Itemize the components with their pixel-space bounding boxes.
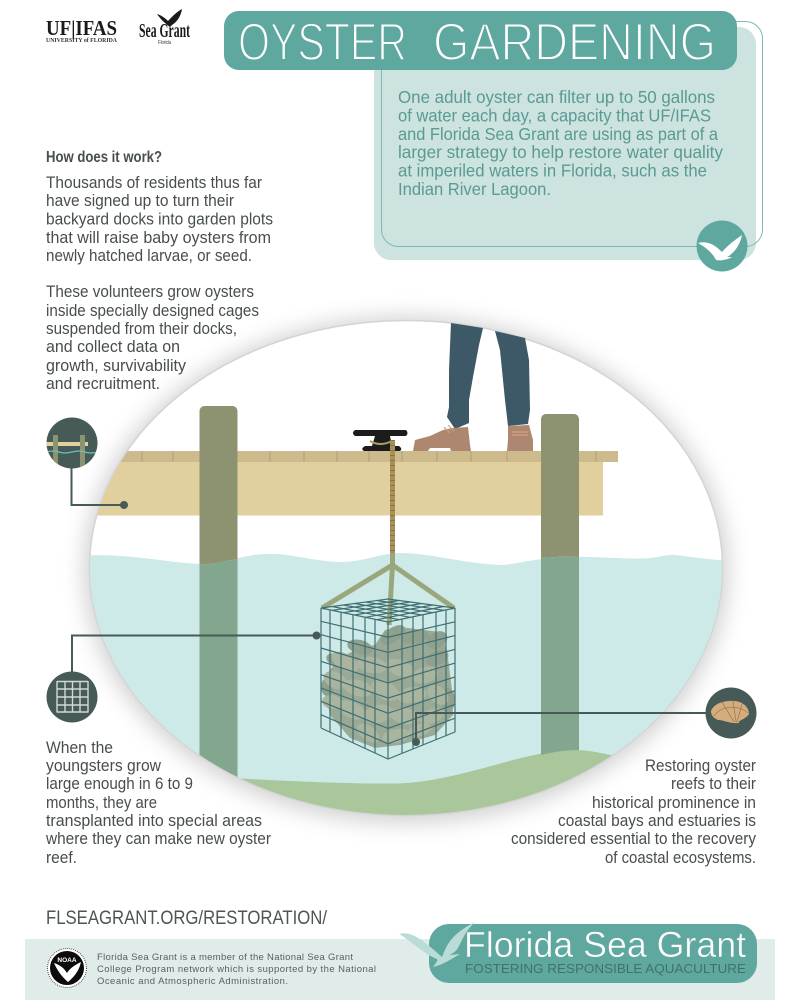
- text: volunteers: growth, survivability: [46, 357, 187, 375]
- text: residents: Thousands of residents thus far: [46, 174, 262, 192]
- intro text: and Florida Sea Grant are using as part of a: [398, 124, 718, 144]
- text: how does it work: How does it work?: [46, 149, 162, 166]
- person legs: [413, 323, 533, 451]
- intro text: One adult oyster can filter up to 50 gallons: [398, 87, 715, 107]
- text: restoring reefs: considered essential to the recovery: [511, 830, 757, 848]
- text: residents: have signed up to turn their: [46, 192, 234, 210]
- logo: UF/IFAS: UF|IFAS: [46, 16, 117, 40]
- intro text: larger strategy to help restore water quality: [398, 142, 723, 162]
- logo: Sea Grant: [139, 9, 190, 46]
- text: residents: newly hatched larvae, or seed.: [46, 247, 252, 265]
- membership note: Oceanic and Atmospheric Administration.: [97, 976, 288, 987]
- posts: [200, 406, 579, 790]
- icon: dock callout: [46, 418, 128, 509]
- text: transplant: youngsters grow: [46, 757, 161, 775]
- website url: FLSEAGRANT.ORG/RESTORATION/: [46, 908, 328, 929]
- text: volunteers: and recruitment.: [46, 375, 160, 393]
- text: volunteers: and collect data on: [46, 338, 180, 356]
- intro text: Indian River Lagoon.: [398, 179, 551, 199]
- logo: Sea Grant: Florida: [158, 40, 172, 46]
- text: transplant: When the: [46, 739, 113, 757]
- logo: Sea Grant: Sea Grant: [139, 20, 190, 42]
- membership note: College Program network which is supported by the National: [97, 964, 376, 975]
- text: restoring reefs: historical prominence in: [592, 794, 756, 812]
- text: transplant: transplanted into special areas: [46, 812, 262, 830]
- logo: UF/IFAS: UNIVERSITY of FLORIDA: [46, 38, 118, 44]
- text: transplant: large enough in 6 to 9: [46, 775, 193, 793]
- brand pill: [399, 922, 757, 983]
- NOAA logo: [47, 948, 87, 988]
- text: volunteers: inside specially designed cages: [46, 302, 259, 320]
- NOAA logo: NOAA: [57, 957, 77, 964]
- icon: cage callout: [46, 632, 320, 722]
- brand bird: [399, 922, 475, 967]
- text: restoring reefs: reefs to their: [671, 775, 756, 793]
- text: restoring reefs: coastal bays and estuaries is: [558, 812, 756, 830]
- icon: oyster callout: [412, 688, 756, 746]
- text: residents: [46, 174, 273, 265]
- text: transplant: where they can make new oyster: [45, 830, 271, 848]
- illustration: dock scene: [80, 317, 730, 830]
- intro text: of water each day, a capacity that UF/IFAS: [398, 106, 711, 126]
- title banner: [224, 11, 737, 72]
- text: restoring reefs: [511, 757, 757, 867]
- membership note: Florida Sea Grant is a member of the National Sea Grant: [97, 952, 353, 963]
- text: restoring reefs: Restoring oyster: [645, 757, 756, 775]
- wire cage: [321, 599, 455, 759]
- icon: bird badge: [696, 220, 748, 272]
- text: transplant: reef.: [46, 849, 77, 867]
- text: residents: backyard docks into garden plots: [46, 210, 273, 228]
- text: volunteers: [46, 283, 259, 393]
- water: [90, 553, 722, 784]
- intro text: at imperiled waters in Florida, such as the: [398, 160, 707, 180]
- cleat: [353, 430, 408, 451]
- text: restoring reefs: of coastal ecosystems.: [605, 849, 756, 867]
- title banner: GARDENING: [433, 13, 716, 72]
- brand pill: FOSTERING RESPONSIBLE AQUACULTURE: [465, 961, 746, 976]
- dock: [80, 451, 618, 516]
- oysters: [321, 621, 455, 748]
- text: residents: that will raise baby oysters from: [46, 229, 271, 247]
- title banner: OYSTER: [238, 13, 407, 72]
- brand pill: Florida Sea Grant: [464, 924, 746, 965]
- rope: [322, 440, 454, 625]
- intro text: [398, 87, 723, 199]
- text: transplant: months, they are: [46, 794, 157, 812]
- panel: intro: [374, 22, 762, 272]
- text: volunteers: suspended from their docks,: [46, 320, 237, 338]
- membership note: [97, 952, 376, 987]
- text: transplant: [45, 739, 271, 867]
- text: volunteers: These volunteers grow oysters: [46, 283, 254, 301]
- footer band: [25, 939, 775, 1000]
- ground: [241, 750, 612, 815]
